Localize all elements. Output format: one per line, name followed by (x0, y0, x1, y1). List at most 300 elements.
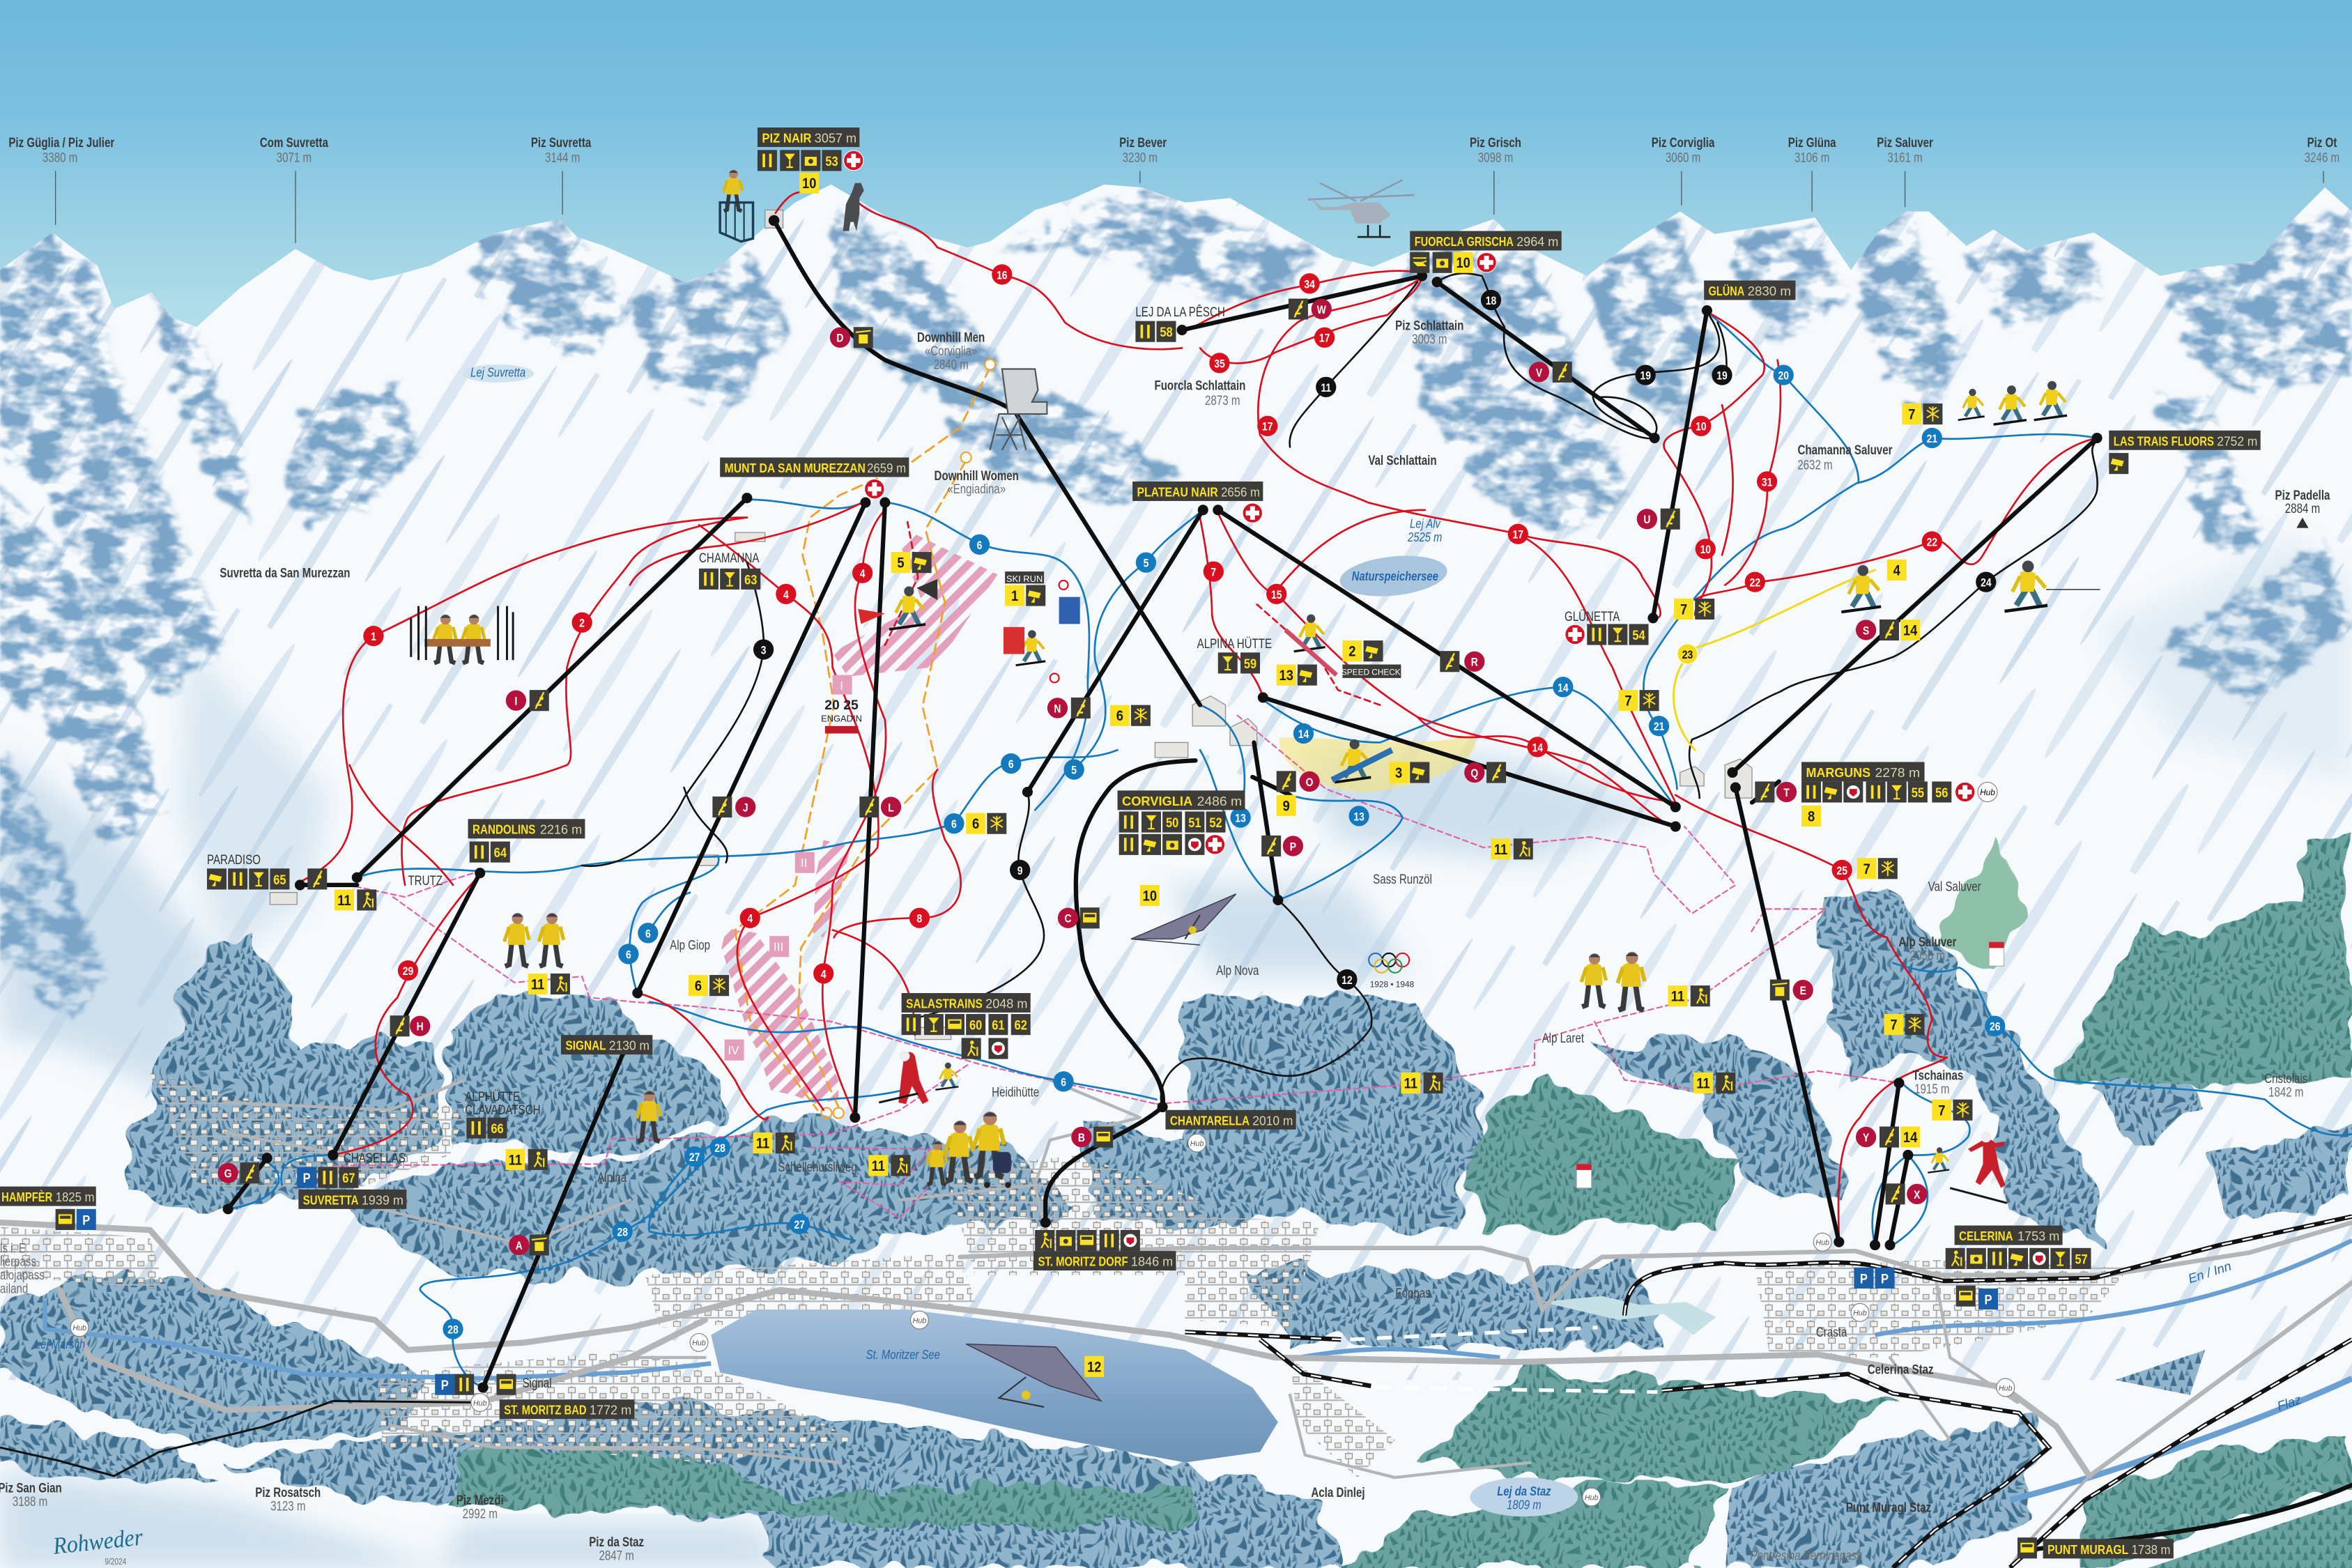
station: Chantarella: 2010 m (1252, 1113, 1293, 1128)
station: St. Moritz Bad (435, 1374, 634, 1419)
peak labels: Piz Grisch (1470, 134, 1521, 150)
piste number markers: 14 (1298, 728, 1309, 741)
station: Munt da San Murezzan: MUNT DA SAN MUREZZAN (725, 461, 866, 475)
yellow activity tags: 11 (1404, 1075, 1417, 1092)
place names: En / Inn (2186, 1259, 2233, 1286)
place names: 2884 m (2285, 500, 2320, 516)
station: Hampfer: P (82, 1213, 90, 1228)
illustration: downhill skier (2004, 560, 2100, 611)
lift lines (223, 215, 2352, 1555)
piste number markers: 1 (371, 631, 376, 643)
lift letter markers with icons: P (1290, 840, 1296, 854)
station: Marguns: 55 (1912, 785, 1924, 800)
station: Suvretta: P (303, 1171, 311, 1185)
piste number markers: 10 (1696, 421, 1707, 433)
station: Fuorcla Grischa (1410, 231, 1562, 273)
station: Salastrains: 2048 m (985, 996, 1027, 1010)
place names: Downhill Women (935, 468, 1019, 483)
illustration: olympic rings: 1928 • 1948 (1370, 979, 1415, 989)
lift letter markers with icons: T (1783, 787, 1790, 799)
piste number markers: 28 (714, 1142, 725, 1155)
station: Las Trais Fluors: 2752 m (2217, 433, 2257, 448)
villages (0, 1073, 2130, 1477)
peak labels: Piz Corviglia (1652, 134, 1715, 150)
station: Corviglia: 52 (1209, 815, 1222, 830)
lift letter markers with icons: D (836, 332, 843, 345)
station: Chantarella (1165, 1110, 1296, 1130)
piste number markers: 20 (1778, 370, 1789, 383)
place names: 3188 m (13, 1493, 47, 1509)
station: Hampfer (0, 1187, 96, 1230)
place names: Sass Runzöl (1373, 871, 1432, 886)
illustration: hang glider over lake (966, 1344, 1101, 1407)
signs: forest protection (1576, 942, 2004, 1188)
railway (0, 1217, 2352, 1567)
piste number markers: 27 (689, 1151, 700, 1164)
piste number markers: 6 (626, 948, 631, 962)
illustration: 2025 championship logo: ENGADIN (821, 713, 862, 723)
yellow activity tags: 6 (1116, 708, 1123, 725)
station: Hampfer: 1825 m (56, 1190, 95, 1204)
illustration: seated skiers on bench (411, 606, 513, 663)
place names: Piz San Gian (0, 1480, 62, 1496)
piste number markers: 6 (951, 818, 957, 831)
piste number markers: 5 (1144, 558, 1149, 570)
station: Corviglia: 50 (1166, 815, 1178, 830)
lakes (462, 364, 1716, 1516)
place names: Alp Giop (670, 937, 710, 953)
place names: Celerina Staz (1868, 1362, 1934, 1377)
peak labels: Piz Saluver (1877, 134, 1933, 150)
station: Munt da San Murezzan (720, 457, 909, 499)
sky (0, 0, 2352, 330)
hub markers: Hub (473, 1399, 487, 1408)
station: Munt da San Murezzan: 2659 m (867, 461, 906, 475)
yellow activity tags (335, 403, 1972, 1377)
illustration: runner (637, 1091, 661, 1142)
place names: 2632 m (1797, 457, 1833, 472)
station: Piz Nair: 53 (825, 154, 838, 169)
station: Suvretta (297, 1150, 406, 1209)
station: Las Trais Fluors (2109, 431, 2261, 474)
station: Las Trais Fluors: LAS TRAIS FLUORS (2114, 433, 2214, 448)
piste number markers: 28 (447, 1324, 459, 1337)
station: Chamanna: 63 (744, 572, 757, 587)
piste number markers: 13 (1353, 810, 1365, 824)
piste number markers: 26 (1990, 1021, 2000, 1033)
illustration: ibex (843, 183, 864, 231)
place names: 1915 m (1914, 1081, 1950, 1097)
lift letter markers with icons: V (1536, 367, 1543, 380)
station: Randolins (468, 819, 585, 863)
station: Celerina: 57 (2075, 1252, 2088, 1267)
piste number markers: 7 (1210, 567, 1216, 579)
lift letter markers with icons: O (1306, 776, 1314, 789)
place names: Heidihütte (992, 1084, 1039, 1100)
station: Trutz: TRUTZ (408, 873, 443, 888)
lift letter markers with icons: S (1863, 624, 1869, 638)
station: Marguns: MARGUNS (1806, 765, 1870, 780)
illustration: 2025 championship logo: 20 25 (824, 698, 859, 713)
place names: Alpina (597, 1169, 627, 1185)
yellow activity tags: 14 (1903, 622, 1917, 639)
piste number markers: 13 (1235, 813, 1246, 825)
piste number markers: 22 (1750, 577, 1760, 590)
yellow activity tags: 1 (1011, 588, 1018, 604)
piste number markers: 22 (1927, 536, 1937, 549)
illustration: ski racer (858, 579, 937, 629)
piste number markers: 14 (1558, 682, 1569, 695)
station: Celerina: P (1985, 1292, 1992, 1307)
piste number markers: 24 (1981, 577, 1992, 590)
illustration: skiers at Las Trais Fluors (1958, 381, 2067, 424)
place names: Lej da Staz (1497, 1484, 1551, 1498)
station: Signal: 2130 m (609, 1038, 650, 1053)
peak labels: 3060 m (1666, 150, 1700, 165)
piste number markers: 28 (617, 1227, 628, 1239)
race zone labels: III (774, 940, 783, 954)
station: Glunetta: 54 (1632, 628, 1645, 643)
red pistes (300, 192, 2097, 1242)
station: Punt Muragl: PUNT MURAGL (2047, 1542, 2128, 1557)
peak labels: Piz Suvretta (531, 134, 592, 150)
station: Hampfer: HAMPFÈR (1, 1190, 52, 1204)
station: Lej da la Pesch: LEJ DA LA PÊSCH (1135, 304, 1225, 320)
station: Corviglia: CORVIGLIA (1122, 794, 1192, 808)
station: Suvretta: 67 (342, 1171, 355, 1185)
piste number markers: 11 (1321, 382, 1332, 394)
piste number markers: 29 (403, 965, 413, 978)
station: St. Moritz Bad: ST. MORITZ BAD (504, 1403, 587, 1417)
piste number markers: 34 (1304, 278, 1315, 291)
piste number markers: 19 (1716, 370, 1728, 383)
yellow freeride zone (1279, 735, 1475, 792)
place names: Flaz (2275, 1392, 2303, 1413)
station: Alphutte Clavadatsch (465, 1089, 540, 1139)
station: St. Moritz Dorf: 1846 m (1131, 1254, 1173, 1269)
illustration: hang glider over Alp Nova (1131, 894, 1236, 945)
station: Gluna: 2830 m (1748, 284, 1791, 298)
yellow activity tags: 5 (897, 555, 905, 571)
piste number markers: 5 (1071, 764, 1077, 777)
yellow activity tags: 11 (531, 976, 544, 993)
place names: ailand (0, 1281, 28, 1296)
station: Fuorcla Grischa: 2964 m (1516, 234, 1558, 249)
peak labels: 3161 m (1887, 150, 1923, 165)
yellow activity tags: 11 (872, 1158, 885, 1174)
piste number markers: 31 (1762, 476, 1773, 489)
place names: Val Saluver (1928, 879, 1981, 894)
station: Alphutte Clavadatsch: 66 (491, 1121, 504, 1136)
station: Lej da la Pesch: 58 (1160, 325, 1173, 340)
piste number markers: 21 (1654, 721, 1665, 734)
lift letter markers with icons: G (224, 1168, 232, 1181)
place names: Naturspeichersee (1352, 569, 1438, 583)
illustration: family with pram (927, 1112, 1011, 1188)
place names: Piz Schlattain (1395, 318, 1463, 333)
blue pistes (228, 312, 2352, 1388)
yellow activity tags: 7 (1863, 861, 1870, 877)
place names: Lej Alv (1410, 516, 1441, 531)
station: Corviglia: 2486 m (1197, 794, 1242, 808)
station: Marguns: 56 (1935, 785, 1948, 800)
peak labels: Piz Ot (2307, 134, 2337, 150)
station: Marguns: 8 (1808, 808, 1815, 825)
station: St. Moritz Dorf (1033, 1230, 1176, 1270)
station: St. Moritz Bad: P (441, 1378, 449, 1393)
station: Celerina (1854, 1226, 2091, 1309)
lift letter markers with icons: B (1078, 1132, 1085, 1144)
place names: «Corviglia» (925, 343, 977, 359)
place names: «Engiadina» (947, 481, 1006, 497)
piste number markers: 4 (860, 568, 866, 581)
yellow activity tags: 2 (1348, 643, 1355, 660)
station: Alphutte Clavadatsch: ALPHÜTTE (465, 1089, 520, 1104)
place names: 2840 m (933, 357, 969, 372)
winter walking trails (333, 716, 1900, 1218)
lift letter markers with icons: C (1065, 913, 1072, 925)
illustration: 2025 championship logo (821, 675, 862, 734)
yellow activity tags: 7 (1890, 1017, 1898, 1033)
station: Alpina Hutte: ALPINA HÜTTE (1197, 636, 1272, 651)
station: Celerina: P (1881, 1271, 1889, 1286)
place names: Piz Rosatsch (255, 1484, 321, 1500)
lift letter markers with icons: J (743, 801, 748, 815)
peak labels: Piz Bever (1119, 134, 1167, 150)
piste number markers: 6 (1061, 1076, 1066, 1089)
piste number markers: 17 (1513, 529, 1523, 541)
hub markers: Hub (72, 1324, 86, 1332)
station: Celerina: P (1860, 1271, 1868, 1286)
hub markers: Hub (1999, 1384, 2013, 1392)
illustration: ski instructor and child at Salastrains (879, 1051, 958, 1104)
piste number markers (363, 264, 2005, 1339)
piste number markers: 6 (977, 539, 982, 552)
piste number markers: 8 (917, 913, 922, 925)
peak labels: Piz Glüna (1788, 134, 1836, 150)
place names: Alp Laret (1542, 1030, 1584, 1045)
place names: Suvretta da San Murezzan (220, 565, 351, 581)
piste number markers: 23 (1682, 649, 1693, 661)
illustration: snowboarder (1332, 739, 1392, 782)
station: Chamanna: CHAMANNA (699, 550, 760, 566)
yellow activity tags: 11 (756, 1135, 769, 1152)
race zone labels (725, 852, 815, 1061)
yellow activity tags: 9 (1283, 798, 1290, 815)
lift letter markers with icons: A (516, 1240, 523, 1252)
place names: 1842 m (2268, 1084, 2303, 1100)
lift letter markers with icons: X (1914, 1189, 1920, 1201)
place names: Lej Marsch (35, 1337, 85, 1351)
station: Corviglia (1118, 790, 1245, 855)
piste number markers: 35 (1214, 358, 1225, 371)
yellow activity tags: 7 (1680, 601, 1687, 618)
peak labels: 3098 m (1478, 150, 1513, 165)
illustration: ski run gates (1004, 571, 1080, 682)
place names: Piz da Staz (589, 1534, 644, 1550)
hub markers: Hub (1853, 1309, 1867, 1318)
yellow activity tags: 4 (1893, 562, 1900, 579)
yellow activity tags: 7 (1938, 1102, 1945, 1119)
hub markers (70, 1134, 2015, 1506)
peak labels: 3071 m (277, 150, 312, 165)
station: Piz Nair (758, 128, 863, 194)
forests (0, 885, 2352, 1568)
station: Glunetta (1565, 608, 1649, 645)
illustration: Corviglia downhill tower (990, 369, 1047, 450)
station: Corviglia: 51 (1188, 815, 1201, 830)
lift letter markers with icons: Y (1863, 1132, 1869, 1144)
piste number markers: 4 (747, 913, 753, 925)
station: Fuorcla Grischa: 10 (1456, 255, 1470, 272)
piste number markers: 17 (1319, 332, 1330, 345)
piste number markers: 4 (783, 589, 789, 601)
place names: Piz Mezdi (456, 1492, 504, 1507)
piste number markers: 6 (645, 928, 651, 941)
station: Paradiso: PARADISO (207, 852, 261, 867)
piste number markers: 21 (1927, 433, 1938, 445)
lift letter markers with icons: Q (1470, 767, 1478, 780)
place names: Piz Padella (2275, 487, 2330, 502)
station: Chantarella: CHANTARELLA (1170, 1113, 1250, 1128)
place names: Punt Muragl Staz (1846, 1500, 1931, 1515)
piste number markers: 10 (1700, 544, 1711, 557)
station: Suvretta: SUVRETTA (303, 1192, 358, 1207)
place names: Rohweder (51, 1524, 144, 1560)
yellow activity tags: 11 (337, 893, 351, 909)
station: Paradiso: 65 (273, 873, 286, 887)
lift letter markers with icons: N (1054, 702, 1061, 716)
mountain huts (270, 210, 1752, 1040)
yellow activity tags: 6 (695, 978, 702, 994)
yellow activity tags: 7 (1908, 406, 1915, 423)
station: Celerina: CELERINA (1959, 1229, 2013, 1243)
yellow activity tags: 11 (1696, 1075, 1710, 1092)
station: Plateau Nair: PLATEAU NAIR (1137, 484, 1218, 499)
lift letter markers with icons: R (1471, 656, 1478, 669)
station: Gluna (1704, 281, 1795, 300)
illustration: helicopter (1308, 180, 1415, 237)
station: Marguns: 2278 m (1875, 765, 1920, 780)
place names: 9/2024 (105, 1558, 127, 1567)
yellow activity tags: 11 (509, 1152, 522, 1169)
peak labels: Piz Güglia / Piz Julier (8, 134, 114, 150)
place names: 2847 m (599, 1548, 634, 1563)
station: Plateau Nair (1132, 482, 1263, 523)
illustration: ski run gates: SKI RUN (1006, 574, 1043, 584)
peak labels: Com Suvretta (260, 134, 328, 150)
piste number markers: 16 (997, 269, 1008, 282)
station: Punt Muragl (2017, 1537, 2174, 1558)
place names: 2992 m (463, 1505, 498, 1521)
piste number markers: 27 (794, 1219, 805, 1231)
place names: 1809 m (1507, 1498, 1542, 1512)
place names (0, 318, 2330, 1567)
piste number markers: 2 (579, 617, 585, 630)
station: Piz Nair: 3057 m (815, 130, 856, 145)
station: Salastrains: SALASTRAINS (906, 996, 983, 1010)
piste number markers: 25 (1836, 865, 1847, 877)
station: Signal: SIGNAL (565, 1038, 606, 1053)
lift letter markers with icons: W (1317, 304, 1327, 316)
piste number markers: 17 (1262, 421, 1273, 433)
station: Alphutte Clavadatsch: CLAVADATSCH (465, 1102, 540, 1118)
station: Salastrains: 62 (1015, 1017, 1027, 1033)
roads (0, 1080, 2352, 1567)
station: Glunetta: GLÜNETTA (1565, 608, 1620, 624)
place names: Pontresina Berninapass (1750, 1548, 1862, 1563)
station: Randolins: 64 (494, 845, 507, 860)
place names: Tschainas (1913, 1068, 1963, 1083)
peak labels: 3106 m (1794, 150, 1829, 165)
lift letter markers with icons: L (888, 801, 894, 815)
rivers (45, 1240, 2352, 1500)
lift letter markers with icons: E (1800, 985, 1806, 997)
peak labels: 3230 m (1123, 150, 1158, 165)
illustration: hiker at Piz Nair balcony (720, 170, 753, 242)
station: Fuorcla Grischa: FUORCLA GRISCHA (1415, 234, 1514, 249)
station: Signal (561, 1035, 652, 1054)
illustration: olympic rings (1369, 953, 1415, 989)
station: Suvretta: CHASELLAS (344, 1150, 406, 1166)
piste number markers: 19 (1640, 370, 1651, 383)
station: Alpina Hutte (1197, 636, 1272, 673)
yellow activity tags: 3 (1395, 765, 1402, 781)
piste number markers: 6 (1008, 758, 1014, 771)
station: Gluna: GLÜNA (1709, 284, 1744, 298)
station: Salastrains (902, 993, 1031, 1059)
piste number markers: 9 (1017, 865, 1023, 877)
ski area hatch zones (721, 534, 997, 1104)
station: Marguns (1801, 762, 1997, 827)
peak labels: 3380 m (43, 150, 77, 165)
yellow connector piste 23 (1674, 570, 1875, 750)
yellow activity tags: 14 (1903, 1130, 1917, 1146)
peak labels (8, 134, 2339, 243)
station: Piz Nair: 10 (802, 176, 816, 192)
hub markers: Hub (1585, 1493, 1599, 1502)
station: Paradiso (207, 852, 327, 889)
station: Celerina: 1753 m (2017, 1229, 2059, 1243)
station: Marguns: Hub (1980, 787, 1995, 797)
place names: Chamanna Saluver (1798, 442, 1893, 458)
race zone labels: IV (728, 1043, 739, 1057)
place names: Lej Suvretta (470, 365, 525, 380)
place names: Schellenursliweg (778, 1159, 857, 1175)
yellow activity tags: 11 (1671, 988, 1684, 1005)
piste number markers: 12 (1342, 974, 1353, 987)
illustration: speed check skier (1286, 615, 1401, 678)
station: Salastrains: 61 (992, 1017, 1005, 1033)
station: St. Moritz Dorf: ST. MORITZ DORF (1038, 1254, 1128, 1269)
place names: Cristolais (2264, 1070, 2308, 1086)
lift letter markers with icons (218, 298, 1927, 1256)
place names: Alp Saluver (1898, 934, 1957, 950)
place names: St. Moritzer See (866, 1348, 940, 1362)
peak labels: 3246 m (2305, 150, 2339, 165)
yellow activity tags: 11 (1494, 841, 1507, 858)
hub markers: Hub (1190, 1139, 1204, 1148)
place names: Fuorcla Schlattain (1154, 378, 1245, 393)
illustration: walkers at Trutz (505, 913, 564, 967)
place names: 3003 m (1412, 331, 1447, 346)
station: Chamanna (699, 550, 760, 590)
station: Plateau Nair: 2656 m (1221, 484, 1260, 499)
place names: Signal (523, 1375, 552, 1390)
black pistes (582, 273, 2098, 1107)
lift letter markers with icons: H (417, 1021, 424, 1033)
peak labels: 3144 m (545, 150, 580, 165)
